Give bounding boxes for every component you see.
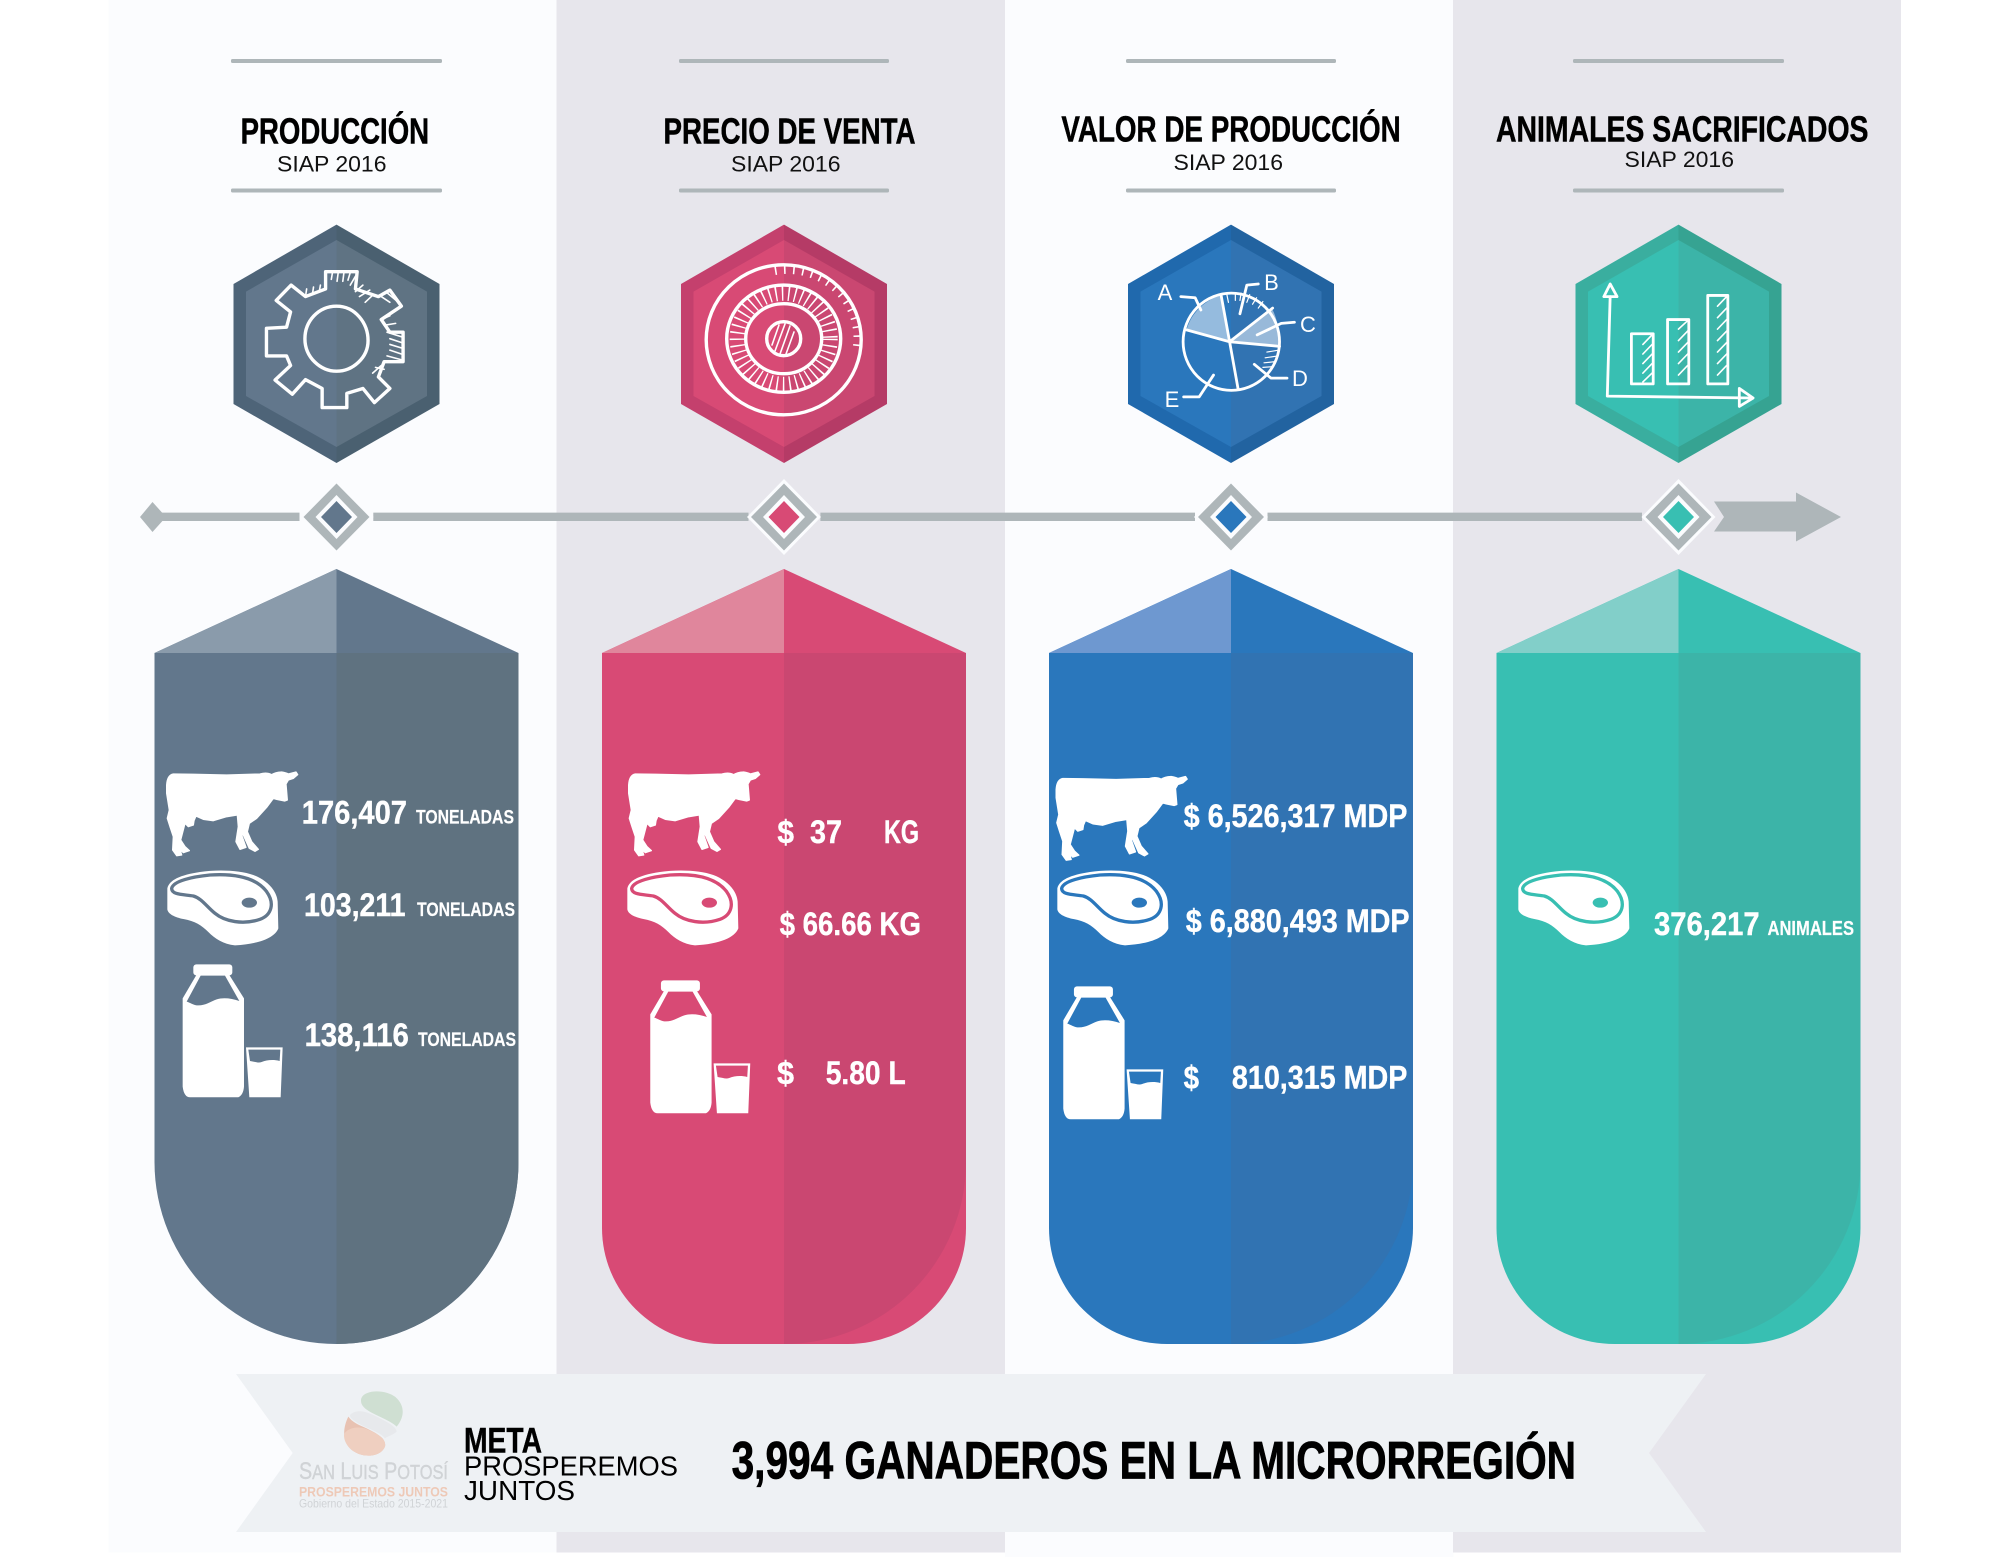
marker: produccion bbox=[300, 479, 374, 555]
row: cow: 176,407 bbox=[302, 794, 407, 830]
icon: pie chart bbox=[1181, 284, 1294, 397]
logo: San Luis Potosi: SAN LUIS POTOSÍ bbox=[299, 1458, 448, 1485]
row: milk: 5.80 L bbox=[826, 1055, 906, 1091]
heading: precio de venta: SIAP 2016 bbox=[731, 152, 840, 176]
heading: produccion: SIAP 2016 bbox=[277, 152, 386, 176]
pie chart labels: B bbox=[1264, 270, 1279, 295]
heading: produccion bbox=[231, 59, 442, 192]
hexagon badge: gear bbox=[234, 225, 440, 463]
shield shape bbox=[154, 569, 518, 1344]
row: milk: $ bbox=[777, 1055, 794, 1091]
row: meat bbox=[1057, 870, 1410, 945]
row: cow bbox=[167, 772, 514, 856]
row: meat: $ 6,880,493 MDP bbox=[1186, 903, 1410, 939]
icon: gear bbox=[266, 272, 403, 408]
icon: target bbox=[706, 265, 861, 415]
meta label: JUNTOS bbox=[464, 1475, 575, 1506]
meta label: META bbox=[464, 1422, 542, 1461]
footer banner bbox=[236, 1374, 1706, 1532]
row: cow: 37 bbox=[810, 814, 842, 850]
row: milk bbox=[183, 964, 516, 1097]
row: meat bbox=[1518, 870, 1854, 945]
heading: precio de venta: PRECIO DE VENTA bbox=[664, 110, 916, 152]
panel: precio de venta bbox=[602, 569, 966, 1344]
logo: San Luis Potosi bbox=[299, 1391, 448, 1511]
row: meat: 103,211 bbox=[304, 887, 406, 923]
shield shape bbox=[1049, 569, 1413, 1344]
logo: San Luis Potosi: Gobierno del Estado 2015-2021 bbox=[299, 1497, 448, 1511]
meta label bbox=[464, 1422, 678, 1506]
pie chart labels bbox=[1158, 270, 1316, 412]
row: cow bbox=[1056, 776, 1407, 860]
row: meat: ANIMALES bbox=[1768, 918, 1854, 940]
row: meat: 376,217 bbox=[1654, 906, 1760, 942]
logo: San Luis Potosi: PROSPEREMOS JUNTOS bbox=[299, 1484, 448, 1500]
panel: produccion bbox=[154, 569, 518, 1344]
marker: precio bbox=[747, 479, 821, 555]
row: milk: 138,116 bbox=[305, 1017, 409, 1053]
heading: valor de produccion: SIAP 2016 bbox=[1174, 150, 1283, 175]
icon: bar chart bbox=[1604, 284, 1753, 406]
row: milk: TONELADAS bbox=[418, 1030, 516, 1051]
pie chart labels: C bbox=[1300, 312, 1316, 337]
hexagon badge: bar chart bbox=[1576, 225, 1782, 463]
pie chart labels: A bbox=[1158, 280, 1173, 305]
heading: produccion: PRODUCCIÓN bbox=[241, 110, 429, 152]
arrow bbox=[1714, 492, 1841, 542]
row: meat bbox=[167, 870, 515, 945]
heading: animales sacrificados bbox=[1496, 59, 1868, 192]
pie chart labels: E bbox=[1165, 387, 1179, 412]
row: meat bbox=[627, 870, 921, 945]
meta label: PROSPEREMOS bbox=[464, 1451, 678, 1482]
row: cow bbox=[629, 772, 919, 856]
row: milk: $ bbox=[1184, 1060, 1199, 1096]
heading: valor de produccion bbox=[1061, 59, 1401, 192]
pie chart labels: D bbox=[1292, 366, 1308, 391]
row: meat: $ 66.66 KG bbox=[780, 906, 921, 942]
ganaderos headline: 3,994 GANADEROS EN LA MICRORREGIÓN bbox=[732, 1430, 1576, 1490]
row: milk bbox=[1063, 986, 1407, 1119]
row: cow: KG bbox=[884, 814, 919, 850]
heading: animales sacrificados: SIAP 2016 bbox=[1624, 147, 1734, 172]
panel: valor de produccion bbox=[1049, 569, 1413, 1344]
hexagon badge: pie chart bbox=[1128, 225, 1334, 463]
shield shape bbox=[1496, 569, 1860, 1344]
row: meat: TONELADAS bbox=[417, 900, 515, 921]
row: cow: $ 6,526,317 MDP bbox=[1184, 798, 1407, 834]
row: milk bbox=[650, 980, 906, 1113]
row: cow: $ bbox=[777, 814, 794, 850]
panel: animales sacrificados bbox=[1496, 569, 1860, 1344]
marker: valor bbox=[1194, 479, 1268, 555]
shield shape bbox=[602, 569, 966, 1344]
row: milk: 810,315 MDP bbox=[1232, 1060, 1407, 1096]
timeline bbox=[140, 479, 1841, 555]
hexagon badge: target bbox=[681, 225, 887, 463]
row: cow: TONELADAS bbox=[416, 807, 514, 828]
heading: valor de produccion: VALOR DE PRODUCCIÓN bbox=[1061, 108, 1401, 150]
heading: precio de venta bbox=[664, 59, 916, 192]
marker: animales bbox=[1642, 479, 1716, 555]
heading: animales sacrificados: ANIMALES SACRIFICADOS bbox=[1496, 108, 1868, 150]
